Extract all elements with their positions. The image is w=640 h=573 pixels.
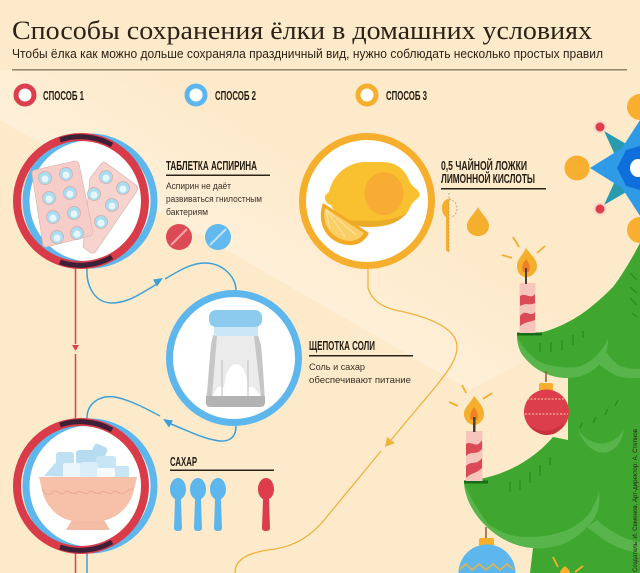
icon: bowl (39, 477, 137, 530)
text block: salt: ЩЕПОТКА СОЛИ (309, 339, 375, 353)
text block: aspirin: развиваться гнилостным (166, 194, 262, 204)
icon: blue spoon 2 (190, 478, 206, 531)
text block: aspirin (166, 159, 270, 217)
text block: salt (309, 339, 413, 385)
icon: half spoon (442, 193, 457, 253)
icon: sugar cubes (44, 443, 129, 478)
icon: blue spoon 1 (170, 478, 186, 531)
panel: sugar circle (17, 422, 154, 550)
icon: blue spoon 3 (210, 478, 226, 531)
icon: blister front (32, 161, 93, 247)
legend: method 2: СПОСОБ 2 (215, 89, 256, 103)
panel: aspirin circle (17, 137, 154, 265)
text block: aspirin: Аспирин не даёт (166, 181, 231, 191)
text block: aspirin: бактериям (166, 207, 208, 217)
blue line: salt to sugar (87, 397, 236, 573)
icon: blue pill (205, 224, 231, 250)
legend: method 3: СПОСОБ 3 (386, 89, 427, 103)
text block: aspirin: ТАБЛЕТКА АСПИРИНА (166, 159, 257, 173)
icon: blue bauble (458, 527, 516, 573)
red line: method 1 path (72, 268, 79, 573)
text block: sugar (170, 455, 274, 471)
panel: salt circle (170, 294, 298, 422)
icon: bottom sparkle (553, 557, 583, 573)
blue line: aspirin to salt (87, 263, 236, 303)
icon: red spoon (258, 478, 274, 531)
legend: method 2 (187, 86, 256, 104)
legend: method 1 (16, 86, 84, 104)
icon: blister back (83, 162, 138, 253)
icon: lower candle (449, 385, 492, 481)
text block: citric acid: ЛИМОННОЙ КИСЛОТЫ (441, 171, 535, 186)
icon: acid drop (467, 207, 489, 236)
icon: upper candle (502, 237, 545, 333)
yellow line: lemon onward (235, 269, 457, 573)
text block: salt: обеспечивают питание (309, 375, 411, 385)
subtitle: Чтобы ёлка как можно дольше сохраняла праздничный вид, нужно соблюдать несколько простых правил (12, 47, 603, 61)
icon: lemon slice (321, 203, 369, 245)
credits: Создатель: И. Семенов, Арт-директор: А. Степнов (633, 429, 639, 572)
title: Способы сохранения ёлки в домашних условиях (12, 16, 592, 45)
icon: lemon (325, 162, 420, 227)
icon: star ornament (564, 94, 640, 243)
illustration: fir tree (464, 243, 640, 573)
text block: citric acid (441, 158, 546, 190)
icon: red bauble (524, 371, 569, 435)
text block: citric acid: 0,5 ЧАЙНОЙ ЛОЖКИ (441, 158, 527, 173)
legend: method 3 (358, 86, 427, 104)
text block: salt: Соль и сахар (309, 362, 365, 372)
icon: red pill (166, 224, 192, 250)
panel: lemon circle (302, 136, 432, 266)
icon: salt shaker (206, 310, 265, 407)
legend: method 1: СПОСОБ 1 (43, 89, 84, 103)
text block: sugar: САХАР (170, 455, 197, 469)
